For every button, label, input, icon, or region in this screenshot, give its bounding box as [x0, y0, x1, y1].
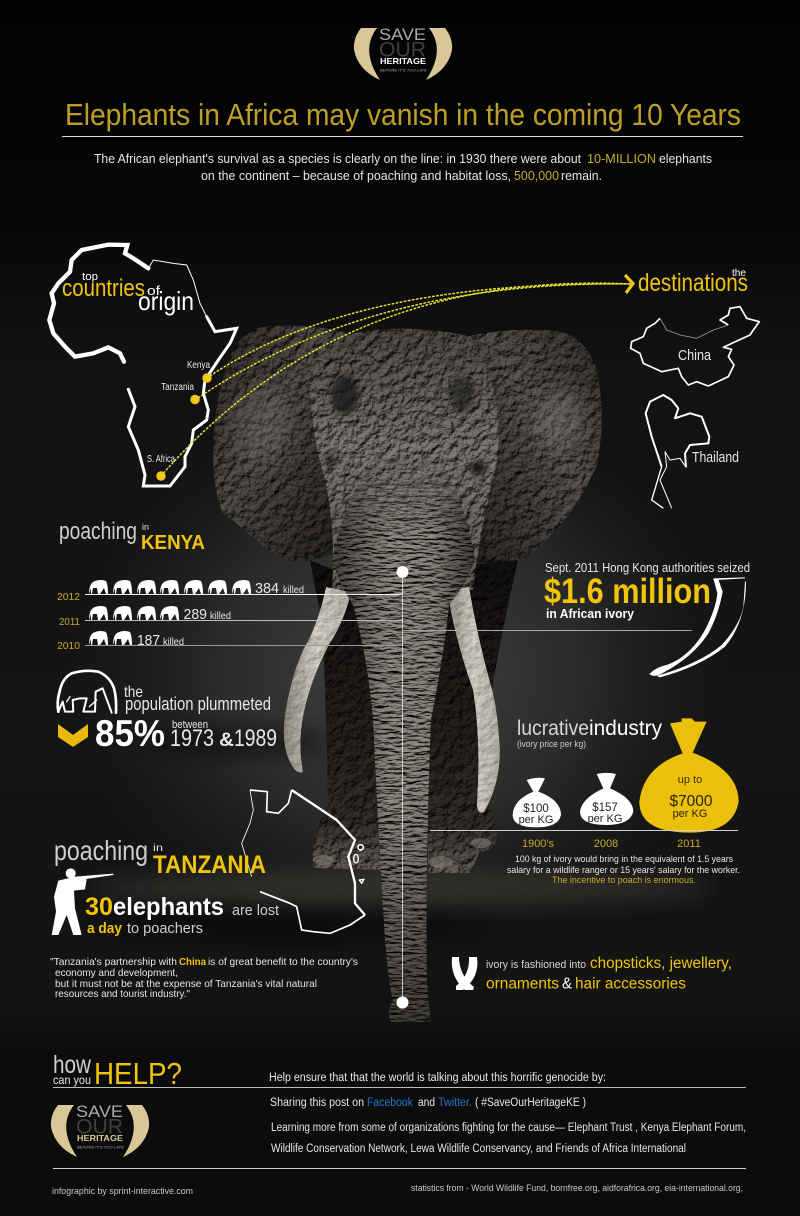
country labels	[147, 360, 210, 465]
intro text: on the continent – because of poaching and habitat loss,	[201, 169, 511, 183]
heading: poaching in Tanzania: TANZANIA	[153, 851, 266, 879]
callout: population plummeted: population plummeted	[125, 694, 271, 714]
intro text: 500,000	[514, 169, 559, 183]
map: Tanzania	[242, 790, 365, 933]
logo bottom: HERITAGE	[77, 1133, 123, 1143]
quote	[50, 956, 358, 1000]
country labels: S. Africa	[147, 454, 175, 465]
quote: China	[179, 956, 206, 968]
callout: population plummeted: between	[172, 719, 208, 731]
heading: poaching in Tanzania: in	[153, 843, 163, 854]
quote: is of great benefit to the country's	[208, 956, 358, 968]
logo top	[354, 26, 452, 80]
2011 row	[59, 606, 402, 628]
callout: Hong Kong ivory seizure: Sept. 2011 Hong Kong authorities seized	[545, 560, 750, 575]
bag: 2008	[580, 773, 633, 850]
2011 row: 289	[184, 606, 207, 623]
quote: economy and development,	[55, 967, 178, 979]
callout: population plummeted: 1973	[170, 725, 214, 752]
map: Africa with countries of origin	[49, 245, 237, 486]
country dots	[156, 373, 212, 481]
bag: 2008: $157	[592, 802, 618, 814]
icon: elephant outline	[58, 671, 116, 713]
map: Thailand	[646, 395, 739, 508]
chart: lucrative industry ivory price bags: (ivory price per kg)	[517, 739, 586, 750]
map: China	[631, 307, 759, 386]
logo top: HERITAGE	[380, 56, 426, 66]
left ear	[213, 325, 350, 562]
arrow head	[625, 275, 633, 293]
how to help text: Help ensure that that the world is talking about this horrific genocide by:	[269, 1072, 606, 1084]
toenails	[313, 838, 491, 868]
elephant photograph	[213, 325, 602, 1022]
map: Thailand: Thailand	[692, 449, 739, 466]
intro text: elephants	[659, 152, 712, 166]
intro text	[94, 152, 712, 183]
country labels: Tanzania	[161, 382, 194, 393]
heading: poaching in Kenya: KENYA	[141, 532, 205, 554]
salary comparison text: salary for a wildlife ranger or 15 years' salary for the worker.	[507, 865, 740, 876]
logo top: SAVE	[379, 26, 426, 44]
chart: lucrative industry ivory price bags: lucrative	[517, 717, 589, 740]
heading: how can you help: can you	[53, 1073, 91, 1087]
bag: 1900's	[513, 778, 561, 850]
icon: poacher with rifle	[52, 868, 113, 935]
callout: population plummeted: 1989	[234, 725, 277, 752]
bag: 1900's: per KG	[519, 814, 553, 826]
heading: top countries of origin	[62, 271, 194, 316]
2012 row: 2012	[57, 591, 80, 603]
callout: Hong Kong ivory seizure: in African ivory	[546, 606, 635, 621]
bag: 2011	[639, 718, 739, 850]
callout: Hong Kong ivory seizure	[402, 560, 750, 677]
right tusk	[447, 587, 500, 813]
heading: top countries of origin: origin	[138, 286, 194, 316]
chart: lucrative industry ivory price bags: industry	[589, 717, 662, 740]
logo bottom: BEFORE IT'S TOO LATE	[77, 1144, 124, 1150]
callout: population plummeted: 85%	[95, 713, 165, 754]
callout: ivory uses: ivory is fashioned into	[486, 959, 586, 971]
logo top: BEFORE IT'S TOO LATE	[380, 68, 427, 72]
salary comparison text: The incentive to poach is enormous.	[552, 875, 696, 886]
icon: crossed tusks	[452, 957, 477, 990]
intro text: remain.	[561, 169, 602, 183]
heading: the destinations: destinations	[638, 269, 748, 297]
2012 row: killed	[283, 585, 304, 596]
logo bottom: OUR	[76, 1116, 123, 1138]
map: China: China	[678, 347, 712, 364]
callout: Hong Kong ivory seizure: $1.6 million	[544, 572, 711, 611]
how to help text: ( #SaveOurHeritageKE )	[475, 1097, 586, 1109]
callout: population plummeted: &	[219, 730, 234, 751]
callout: ivory uses: ornaments	[486, 976, 559, 992]
bag: 2011: 2011	[677, 838, 701, 850]
icon: down chevron	[58, 724, 88, 747]
how to help text: Wildlife Conservation Network, Lewa Wildlife Conservancy, and Friends of Africa International	[271, 1143, 686, 1155]
logo top: OUR	[379, 38, 426, 62]
Africa outline	[49, 245, 237, 486]
heading: top countries of origin: of	[147, 283, 160, 298]
heading: how can you help	[53, 1051, 182, 1091]
bag: 1900's: $100	[523, 803, 549, 815]
heading: top countries of origin: countries	[62, 275, 145, 302]
2011 row: 2011	[59, 616, 80, 628]
how to help text: Facebook	[367, 1097, 413, 1109]
stat: 30 elephants a day: are lost	[232, 902, 280, 919]
how to help text: Sharing this post on	[270, 1097, 364, 1109]
bag: 2008: 2008	[594, 838, 618, 850]
stat: 30 elephants a day	[85, 893, 280, 937]
logo bottom: SAVE	[76, 1103, 123, 1121]
bag: 2011: up to	[678, 774, 702, 786]
how to help text: and	[418, 1097, 435, 1109]
callout: ivory uses	[452, 955, 732, 992]
heading: top countries of origin: top	[82, 271, 98, 283]
stat: 30 elephants a day: elephants	[113, 893, 224, 921]
heading: poaching in Kenya	[59, 518, 205, 554]
salary comparison text	[507, 854, 740, 886]
forehead shadows and eyes	[324, 375, 486, 474]
left tusk	[284, 587, 351, 773]
heading: poaching in Kenya: in	[142, 522, 149, 532]
callout: population plummeted	[58, 671, 277, 754]
title: Elephants in Africa may vanish in the coming 10 Years	[65, 97, 741, 132]
intro text: The African elephant's survival as a species is clearly on the line: in 1930 there were about	[94, 152, 582, 166]
2012 row: 384	[255, 580, 279, 597]
heading: poaching in Tanzania: poaching	[54, 835, 148, 866]
stat: 30 elephants a day: a day	[87, 920, 123, 937]
legs	[310, 560, 518, 873]
how to help text: Learning more from some of organizations fighting for the cause— Elephant Trust , Kenya Elephant Forum,	[271, 1122, 746, 1134]
quote: resources and tourist industry."	[55, 988, 190, 1000]
center timeline line	[396, 566, 408, 1008]
heading: how can you help: how	[53, 1051, 92, 1079]
footer credit: infographic by sprint-interactive.com	[52, 1186, 193, 1197]
dotted routes to destinations	[161, 283, 632, 476]
2010 row	[57, 631, 402, 652]
heading: poaching in Tanzania	[54, 835, 266, 879]
stat: 30 elephants a day: to poachers	[127, 920, 203, 937]
country labels: Kenya	[187, 360, 210, 371]
how to help text: Twitter.	[438, 1097, 472, 1109]
ear highlights	[232, 385, 586, 465]
chart: lucrative industry ivory price bags	[430, 717, 740, 886]
intro text: 10-MILLION	[587, 152, 656, 166]
right ear	[455, 330, 602, 570]
callout: ivory uses: hair accessories	[575, 976, 686, 992]
how to help text	[53, 1072, 746, 1168]
2010 row: 187	[137, 632, 160, 649]
bag: 2011: per KG	[673, 808, 707, 820]
logo bottom	[51, 1103, 149, 1157]
callout: ivory uses: &	[562, 976, 573, 992]
head	[310, 328, 499, 590]
trunk	[332, 452, 475, 1022]
quote: but it must not be at the expense of Tanzania's vital natural	[55, 978, 317, 990]
chart: elephants killed per year	[57, 580, 402, 652]
footer sources: statistics from - World Wildlife Fund, bornfree.org, aidforafrica.org, eia-international.org,	[411, 1183, 743, 1193]
callout: ivory uses: chopsticks, jewellery,	[590, 955, 732, 972]
stat: 30 elephants a day: 30	[85, 893, 113, 921]
2010 row: 2010	[57, 640, 80, 652]
2011 row: killed	[210, 611, 231, 622]
heading: poaching in Kenya: poaching	[59, 518, 137, 545]
2010 row: killed	[163, 637, 184, 648]
quote: "Tanzania's partnership with	[50, 956, 177, 968]
heading: the destinations: the	[732, 268, 746, 279]
callout: population plummeted: the	[124, 684, 143, 701]
bag: 2011: $7000	[669, 793, 713, 810]
2012 row	[57, 580, 402, 603]
icon: tusk outline	[649, 577, 746, 677]
heading: how can you help: HELP?	[94, 1056, 182, 1091]
bag: 1900's: 1900's	[522, 838, 555, 850]
bag: 2008: per KG	[588, 813, 622, 825]
salary comparison text: 100 kg of ivory would bring in the equivalent of 1.5 years	[515, 854, 733, 865]
